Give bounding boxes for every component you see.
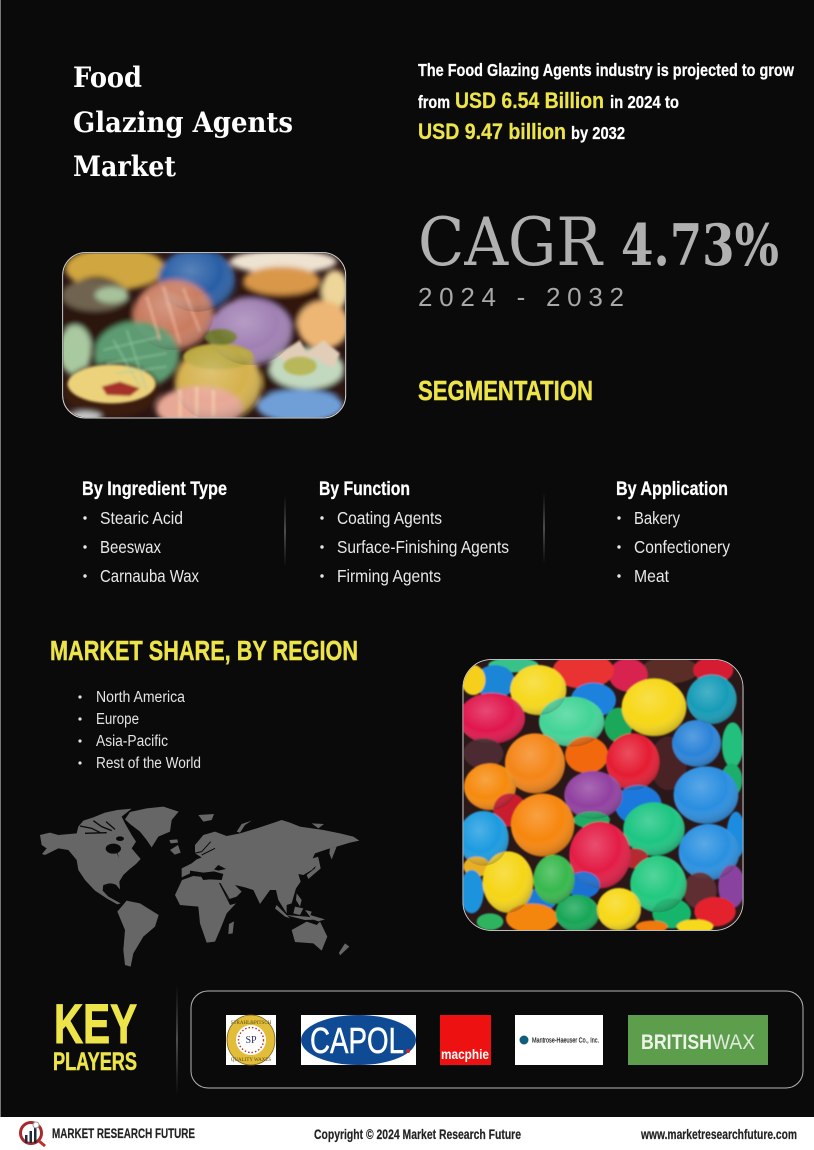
logo: British Wax: BRITISH — [641, 1031, 712, 1054]
region list: North America — [96, 689, 185, 706]
segment column: by ingredient type: Stearic Acid — [100, 508, 183, 528]
logo: Macphie — [440, 1015, 491, 1065]
footer — [0, 1117, 814, 1150]
heading: key players: PLAYERS — [53, 1048, 137, 1076]
logo: Mantrose-Haeuser: Mantrose-Haeuser Co., Inc. — [532, 1038, 599, 1044]
heading: key players: KEY — [54, 992, 137, 1055]
segment column: by function: Firming Agents — [337, 566, 441, 586]
growth projection text — [418, 60, 794, 144]
logo: Strahl and Pitsch: STRAHL&PITSCH — [231, 1021, 272, 1026]
segment column: by ingredient type — [82, 479, 227, 586]
footer: MARKET RESEARCH FUTURE — [52, 1126, 195, 1141]
segment column: by ingredient type: By Ingredient Type — [82, 479, 227, 500]
region list — [78, 689, 201, 772]
region list: Asia-Pacific — [96, 733, 168, 750]
logo: Strahl and Pitsch: QUALITY WAXES — [231, 1058, 271, 1063]
growth projection text: USD 9.47 billion — [418, 119, 566, 144]
title: Food — [73, 61, 142, 94]
CAGR figure: 2024 - 2032 — [418, 282, 624, 312]
title: Market — [73, 150, 176, 183]
region list: Rest of the World — [96, 755, 201, 772]
image: colourful candies — [458, 653, 745, 934]
growth projection text: USD 6.54 Billion — [455, 88, 604, 113]
growth projection text: from — [418, 92, 450, 112]
growth projection text: in 2024 to — [610, 92, 679, 112]
segment column: by function — [319, 479, 509, 586]
logo: Mantrose-Haeuser — [515, 1015, 603, 1065]
title — [73, 61, 293, 183]
key players panel — [191, 991, 803, 1088]
image: glazed chocolates — [62, 252, 346, 418]
segment column: by ingredient type: Beeswax — [100, 537, 161, 557]
title: Glazing Agents — [73, 106, 293, 139]
segment column: by ingredient type: Carnauba Wax — [100, 566, 199, 586]
segment column: by application: Confectionery — [634, 537, 730, 557]
CAGR figure — [418, 204, 779, 312]
logo: British Wax: WAX — [712, 1031, 755, 1054]
heading: market share by region: MARKET SHARE, BY REGION — [50, 635, 358, 666]
region list: Europe — [96, 711, 139, 728]
CAGR figure: CAGR — [418, 204, 604, 281]
logo: Strahl and Pitsch: SP — [245, 1035, 257, 1046]
segment column: by application: By Application — [616, 479, 728, 500]
logo: Capol — [301, 1015, 416, 1065]
logo: Capol: CAPOL — [310, 1020, 404, 1061]
segment column: by application: Bakery — [634, 508, 680, 528]
segment column: by function: Surface-Finishing Agents — [337, 537, 509, 557]
heading: segmentation: SEGMENTATION — [418, 375, 593, 406]
CAGR figure: 4.73% — [621, 212, 779, 279]
footer: Copyright © 2024 Market Research Future — [314, 1127, 521, 1142]
logo: Macphie: macphie — [441, 1046, 489, 1062]
world map — [40, 807, 359, 967]
icon: market research magnifier — [20, 1122, 45, 1146]
logo: Strahl and Pitsch — [226, 1015, 276, 1065]
segment column: by function: By Function — [319, 479, 410, 500]
segment column: by function: Coating Agents — [337, 508, 442, 528]
segment column: by application — [616, 479, 730, 586]
growth projection text: by 2032 — [571, 123, 625, 143]
logo: British Wax — [628, 1015, 768, 1065]
heading: key players — [53, 992, 137, 1076]
segment column: by application: Meat — [634, 566, 669, 586]
